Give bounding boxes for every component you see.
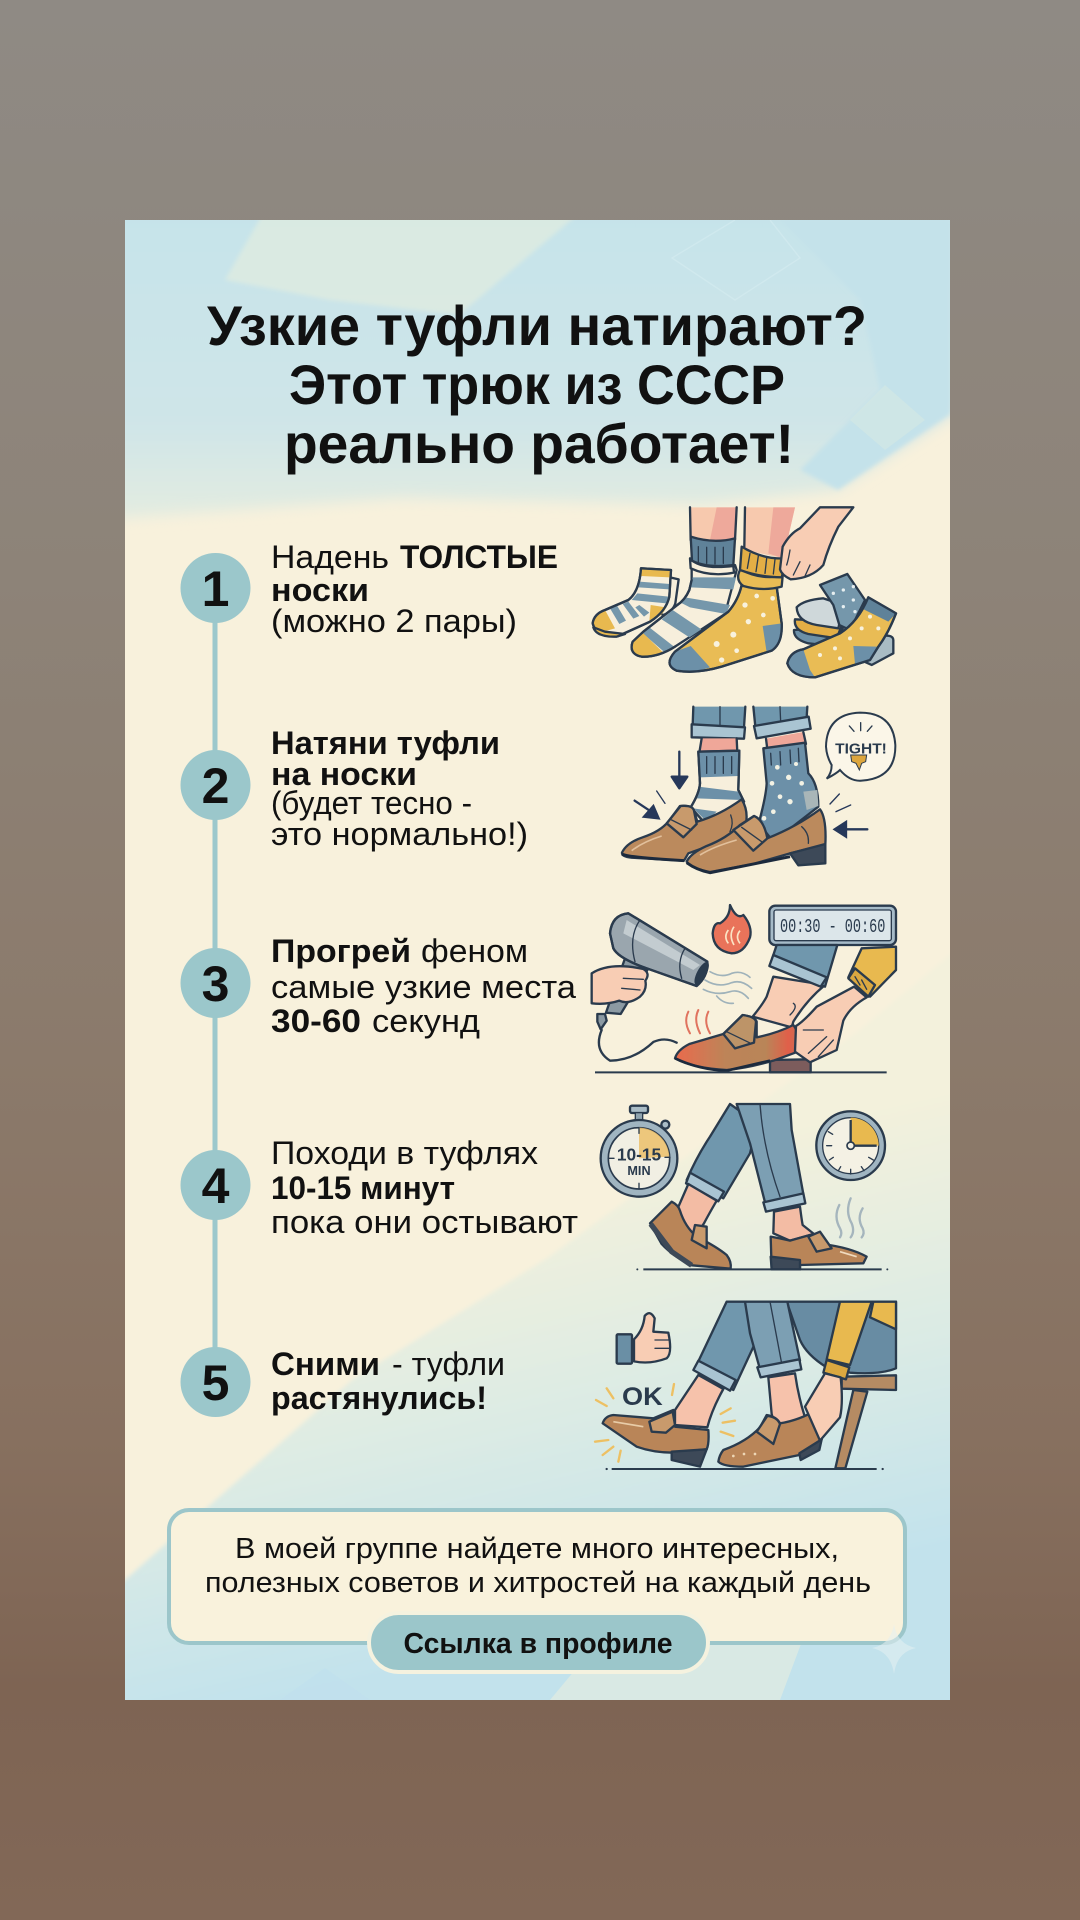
step 2 text: Натяни туфли [271, 725, 500, 761]
right shoe [718, 1409, 822, 1467]
helper arm [848, 947, 896, 997]
step 1 text: Надень [271, 539, 389, 575]
right shoe [687, 809, 826, 872]
legs [687, 1104, 757, 1198]
step 5 text: растянулись! [271, 1380, 487, 1416]
illustration: step 2 tight shoes [622, 707, 895, 873]
panel: infographic card [100, 200, 980, 1720]
step 1 text: носки [271, 572, 369, 608]
step 4 text: Походи в туфлях [271, 1135, 538, 1171]
ground [595, 1069, 887, 1075]
callout: group invitation [169, 1510, 905, 1643]
air waves [703, 972, 752, 1003]
tight speech bubble [826, 713, 895, 781]
step 3 text: секунд [372, 1003, 480, 1039]
back shoe [650, 1202, 731, 1269]
title: Узкие туфли натирают? [207, 294, 867, 357]
step 2 badge [180, 750, 250, 820]
thigh [787, 1302, 896, 1373]
step 5 text: Сними [271, 1346, 380, 1382]
step 1 text: (можно 2 пары) [271, 603, 517, 639]
sock stack [853, 636, 893, 665]
step 3 text: 30-60 [271, 1003, 361, 1039]
hand [780, 507, 853, 579]
flame [713, 905, 751, 953]
leg [753, 977, 825, 1027]
dryer [606, 958, 647, 1014]
chair [842, 1375, 896, 1390]
step 5 text [271, 1346, 505, 1416]
step 4 text: пока они остывают [271, 1204, 578, 1240]
illustration: step 2 tight shoes: TIGHT! [835, 741, 887, 757]
step 4 badge [180, 1150, 250, 1220]
step 3 text [271, 933, 576, 1039]
illustration: step 5 sitting, shoes stretched [595, 1302, 896, 1470]
step 1 text: ТОЛСТЫЕ [400, 539, 558, 575]
timer [769, 906, 896, 945]
step 4 text: 10-15 минут [271, 1170, 455, 1206]
step 5 badge: 5 [202, 1355, 229, 1411]
step 5 text: - туфли [392, 1346, 505, 1382]
step 2 text [271, 725, 528, 852]
illustration: step 4 walking: 10-15 [617, 1145, 662, 1165]
thumbs up [634, 1313, 670, 1362]
left sock [691, 751, 744, 825]
illustration: step 3 hair dryer [592, 905, 896, 1072]
title [207, 294, 867, 475]
step 4 badge: 4 [202, 1158, 230, 1214]
pressure arrows [635, 752, 867, 837]
callout: group invitation: В моей группе найдете много интересных, [235, 1533, 839, 1565]
clock [816, 1111, 885, 1180]
step 4 text [271, 1135, 578, 1240]
button: link in profile: Ссылка в профиле [404, 1628, 672, 1660]
jeans [695, 1302, 755, 1390]
shoe [770, 1059, 811, 1072]
small back sock [660, 577, 679, 615]
step 1 badge [180, 553, 250, 623]
front shoe [771, 1234, 867, 1269]
step 2 text: на носки [271, 756, 417, 792]
stopwatch [630, 1106, 648, 1113]
callout: group invitation: полезных советов и хитростей на каждый день [205, 1567, 871, 1599]
step 2 badge: 2 [202, 758, 229, 814]
arm and hand [870, 1302, 896, 1329]
illustration: step 5 sitting, shoes stretched: OK [622, 1384, 663, 1411]
illustration: step 3 hair dryer: 00:30 - 00:60 [780, 916, 885, 938]
sparks [595, 1384, 735, 1462]
ground [643, 1266, 882, 1272]
step 2 text: (будет тесно - [271, 785, 472, 821]
steam [836, 1198, 864, 1237]
yellow sock [670, 585, 782, 672]
button: link in profile [369, 1613, 708, 1672]
title: реально работает! [284, 412, 794, 475]
left shoe [603, 1410, 709, 1453]
hand [592, 966, 648, 1004]
striped sock [632, 565, 737, 657]
step 1 text [271, 539, 558, 639]
step 5 badge [180, 1347, 250, 1417]
step 3 text: феном [421, 933, 528, 969]
timeline connector [212, 588, 218, 1382]
step 3 badge [180, 948, 250, 1018]
heat marks [686, 1010, 710, 1033]
sparkle icon [872, 1624, 916, 1674]
cord [599, 1030, 677, 1061]
step 3 text: самые узкие места [271, 969, 576, 1005]
title: Этот трюк из СССР [289, 353, 785, 416]
ankles [675, 1375, 723, 1427]
step 3 badge: 3 [202, 956, 229, 1012]
illustration: step 1 socks [593, 507, 896, 677]
step 1 badge: 1 [202, 561, 229, 617]
step 3 text: Прогрей [271, 933, 411, 969]
ground [612, 1466, 877, 1472]
left shoe [622, 799, 747, 861]
right sock [759, 743, 818, 842]
illustration: step 4 walking: MIN [627, 1164, 651, 1178]
step 2 text: это нормально!) [271, 816, 528, 852]
illustration: step 4 walking [601, 1104, 888, 1270]
